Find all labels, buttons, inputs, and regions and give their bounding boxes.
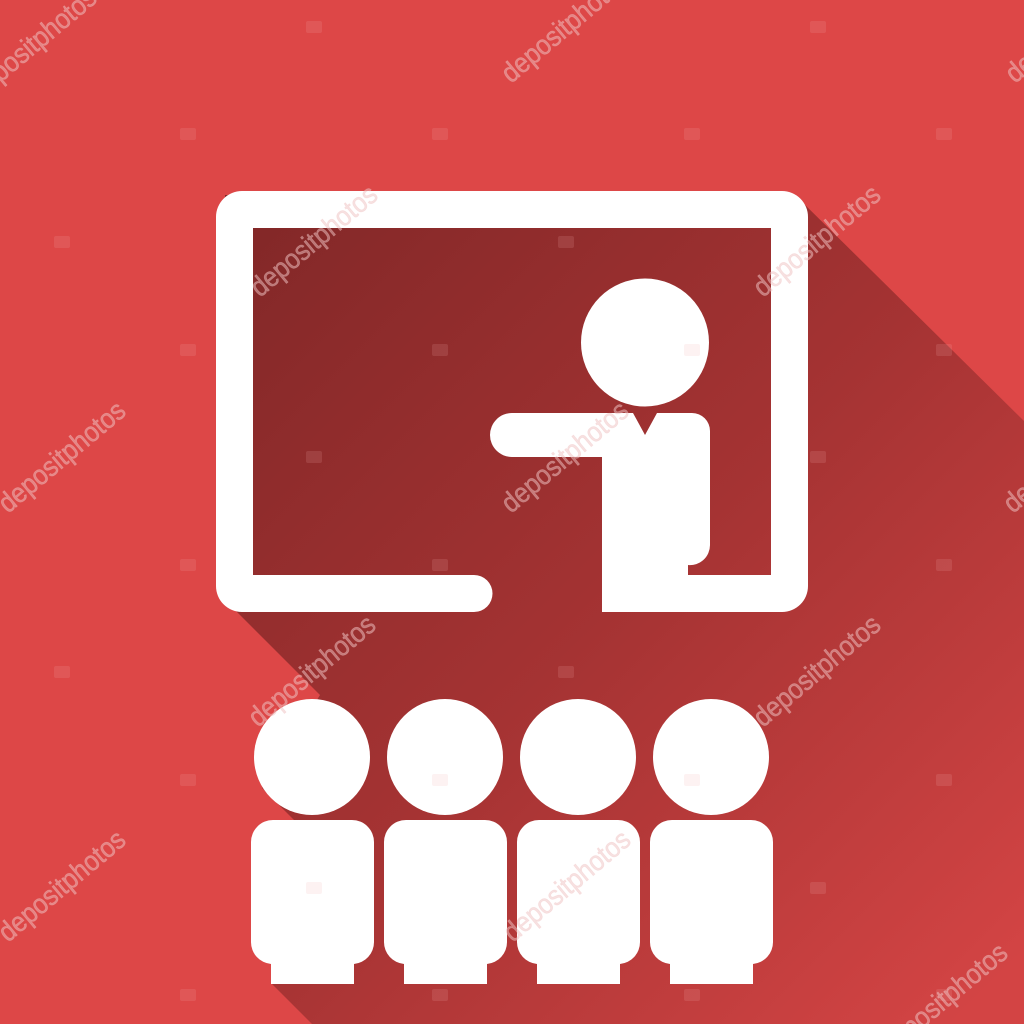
long shadow	[225, 195, 1024, 1024]
watermark text: depositphotos	[495, 395, 634, 519]
presenter head	[581, 278, 709, 406]
watermark text: depositphotos	[747, 609, 886, 733]
watermark text: depositphotos	[747, 179, 886, 303]
chalkboard with presenter body	[216, 191, 808, 612]
student 2	[384, 699, 507, 984]
student 3	[517, 699, 640, 984]
watermark text: depositphotos	[244, 179, 383, 303]
student 1	[251, 699, 374, 984]
watermark text: depositphotos	[497, 824, 636, 948]
watermark text: depositphotos	[242, 609, 381, 733]
student 4	[650, 699, 773, 984]
